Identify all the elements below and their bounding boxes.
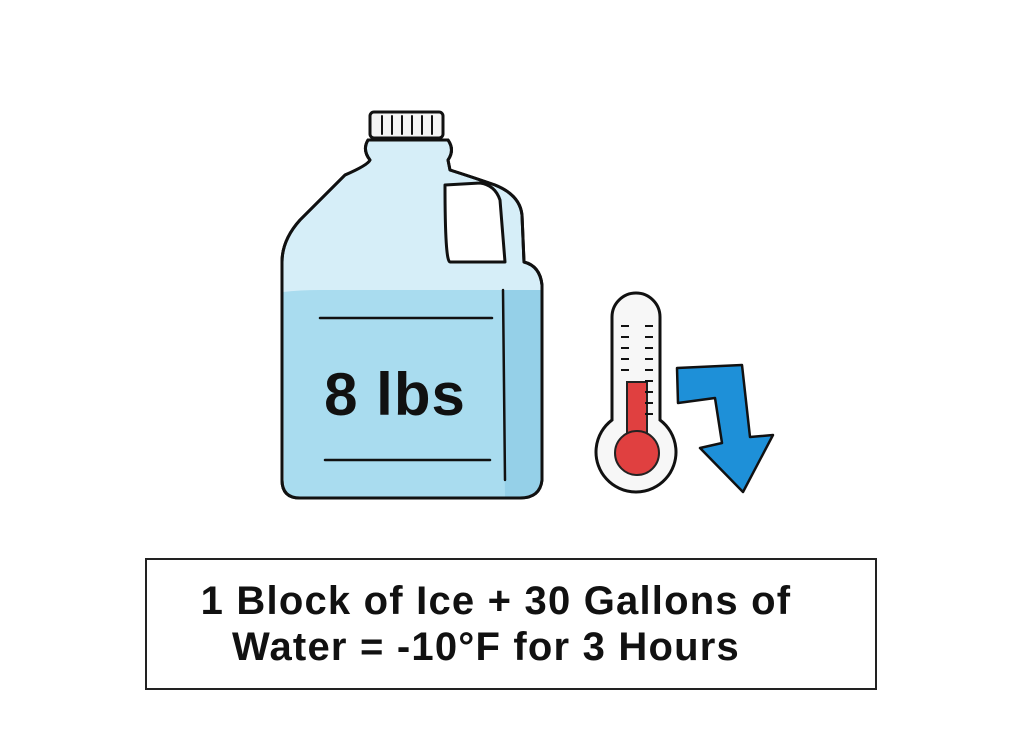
icon: down arrow (677, 365, 773, 492)
jug label: 8 lbs (324, 361, 466, 428)
caption box: 1 Block of Ice + 30 Gallons of (201, 579, 791, 623)
icon: thermometer (596, 293, 676, 492)
caption box (145, 558, 877, 690)
caption box: Water = -10°F for 3 Hours (232, 625, 740, 669)
icon: water jug (282, 112, 542, 498)
